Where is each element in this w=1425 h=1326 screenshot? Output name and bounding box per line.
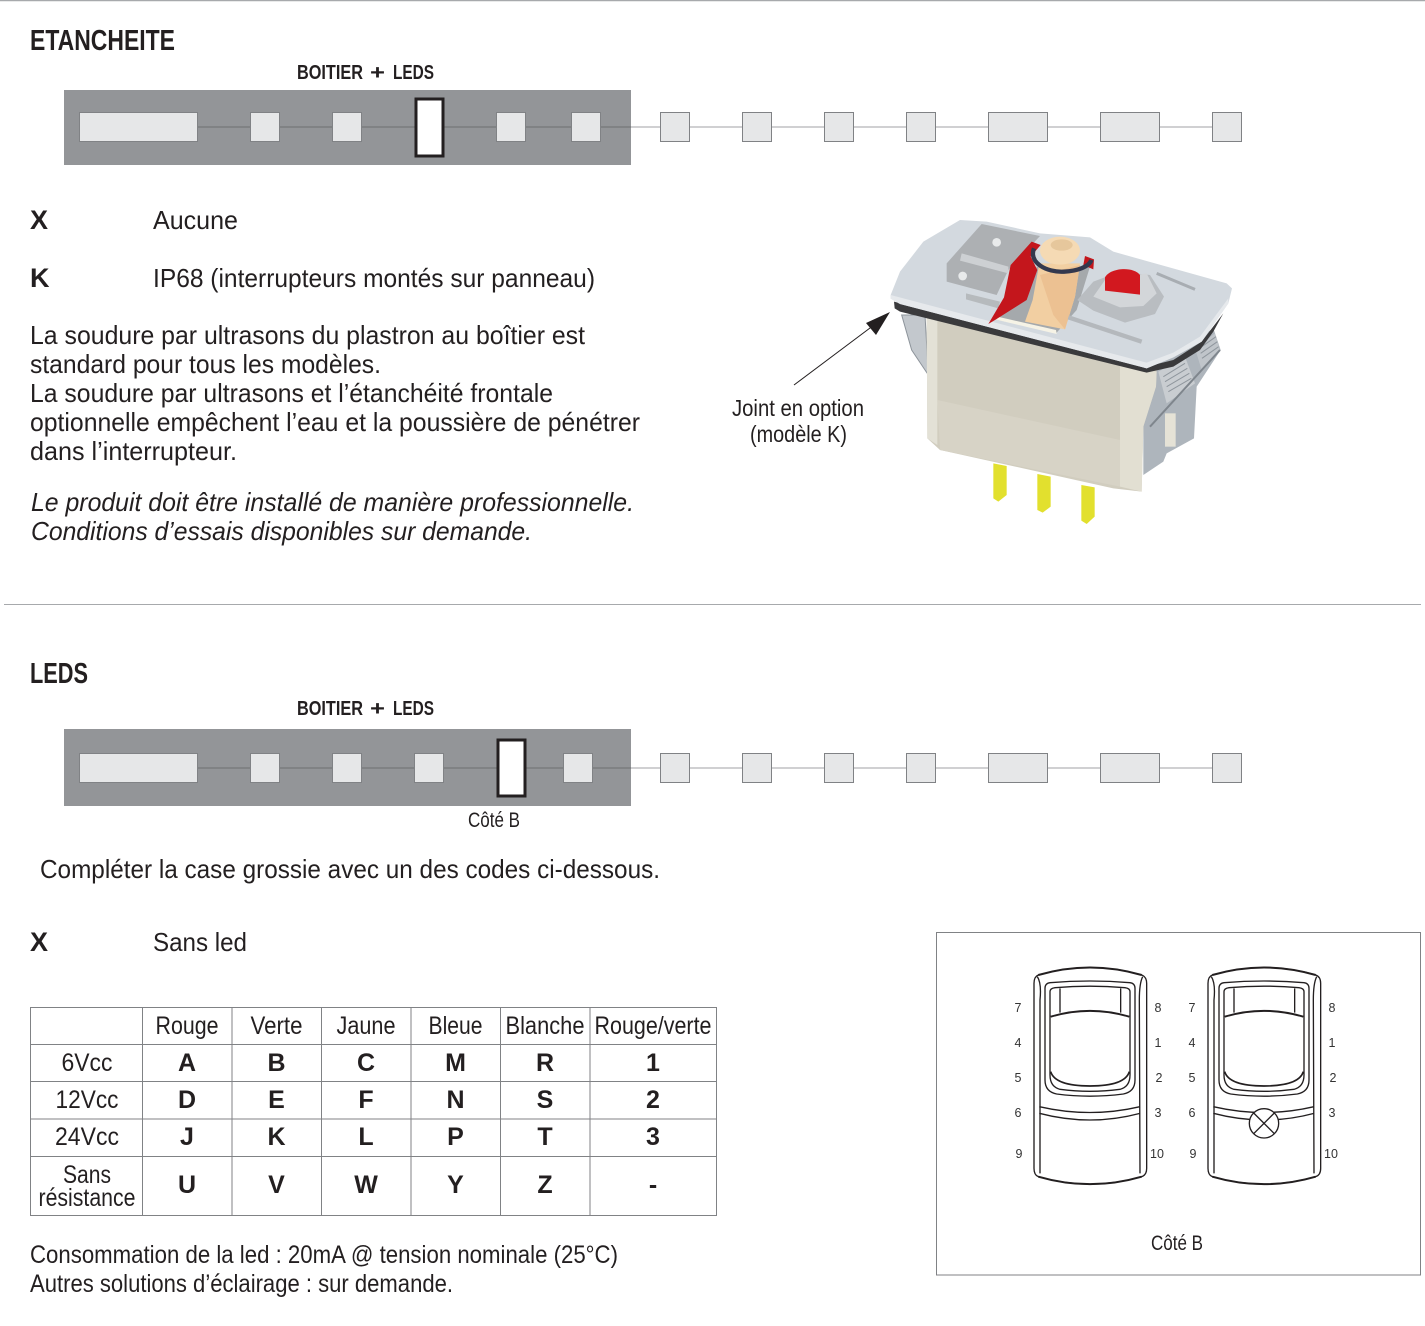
text block: soudure par ultrasons: [30, 320, 640, 466]
pin numbers: 10: [1150, 1147, 1164, 1161]
pin numbers: 3: [1329, 1106, 1336, 1120]
option X: Aucune: Aucune: [153, 205, 238, 235]
table: led codes: C: [357, 1049, 375, 1077]
table: led codes: 6Vcc: [62, 1049, 112, 1077]
heading: ETANCHEITE: ETANCHEITE: [30, 25, 175, 57]
cut opening: [995, 267, 1090, 333]
caption: Cote B: Côté B: [1151, 1232, 1203, 1255]
caption: joint en option: [732, 395, 864, 447]
option X: Sans led: Sans led: [153, 927, 247, 957]
table: led codes: N: [446, 1086, 465, 1114]
red button: [1105, 269, 1140, 295]
label: BOITIER + LEDS: LEDS: [393, 698, 434, 720]
pin numbers: 4: [1015, 1036, 1022, 1050]
table: led codes: [30, 1007, 716, 1216]
table: led codes: V: [268, 1171, 285, 1199]
text block: installation note: Conditions d’essais disponibles sur demande.: [31, 516, 532, 546]
pin numbers: 8: [1329, 1001, 1336, 1015]
text block: installation note: [31, 487, 634, 546]
text block: soudure par ultrasons: optionnelle empêchent l’eau et la poussière de pénétrer: [30, 407, 640, 437]
caption: joint en option: (modèle K): [750, 421, 847, 447]
pin numbers: [1015, 1001, 1338, 1161]
table: led codes: Rouge/verte: [594, 1012, 712, 1040]
option K: IP68: IP68 (interrupteurs montés sur panneau): [153, 263, 595, 293]
pin numbers: 10: [1324, 1147, 1338, 1161]
pins: [993, 463, 1095, 524]
table: led codes: E: [268, 1086, 285, 1114]
label: BOITIER + LEDS: +: [370, 62, 385, 84]
switch outline without lamp: [1034, 967, 1147, 1184]
table: led codes: D: [178, 1086, 196, 1114]
pin numbers: 1: [1155, 1036, 1162, 1050]
pin numbers: 7: [1189, 1001, 1196, 1015]
button housing: [1077, 272, 1164, 323]
footnote: Consommation de la led : 20mA @ tension nominale (25°C): [30, 1241, 618, 1269]
footnote: [30, 1241, 618, 1298]
table: led codes: 3: [646, 1123, 660, 1151]
pin numbers: 9: [1016, 1147, 1023, 1161]
ribs: [1157, 273, 1195, 289]
instruction: Compléter la case grossie avec un des codes ci-dessous.: [40, 854, 660, 884]
table: led codes: P: [447, 1123, 464, 1151]
code diagram: leds: [64, 729, 1242, 806]
text block: soudure par ultrasons: dans l’interrupteur.: [30, 436, 237, 466]
label: BOITIER + LEDS: [297, 62, 434, 84]
label: BOITIER + LEDS: +: [370, 698, 385, 720]
pin numbers: 5: [1189, 1071, 1196, 1085]
right side clips: [1143, 328, 1221, 475]
table: led codes: 12Vcc: [56, 1086, 118, 1114]
code diagram: etancheite: [64, 90, 1242, 165]
option X: Aucune: [30, 205, 238, 235]
label: BOITIER + LEDS: [297, 698, 434, 720]
label: BOITIER + LEDS: LEDS: [393, 62, 434, 84]
table: led codes: Y: [447, 1171, 464, 1199]
footnote: Autres solutions d’éclairage : sur demande.: [30, 1270, 453, 1298]
table: led codes: Rouge: [156, 1012, 218, 1040]
top plate: [891, 220, 1232, 368]
pin numbers: 3: [1155, 1106, 1162, 1120]
panel: Cote B pinout: [936, 932, 1420, 1275]
table: led codes: Bleue: [428, 1012, 482, 1040]
pin numbers: 1: [1329, 1036, 1336, 1050]
table: led codes: T: [537, 1123, 553, 1151]
table: led codes: R: [536, 1049, 554, 1077]
actuator stem: [1025, 263, 1080, 329]
text block: soudure par ultrasons: La soudure par ultrasons et l’étanchéité frontale: [30, 378, 553, 408]
table: led codes: K: [267, 1123, 286, 1151]
table: led codes: résistance: [38, 1184, 136, 1212]
table: led codes: M: [445, 1049, 466, 1077]
pin numbers: 4: [1189, 1036, 1196, 1050]
heading: LEDS: LEDS: [30, 658, 88, 690]
red section: [988, 242, 1041, 324]
caption: joint en option: Joint en option: [732, 395, 864, 421]
text block: installation note: Le produit doit être installé de manière professionnelle.: [31, 487, 634, 517]
option X: Sans led: X: [30, 927, 48, 957]
table: led codes: F: [358, 1086, 374, 1114]
table: led codes: L: [358, 1123, 374, 1151]
table: led codes: Jaune: [336, 1012, 396, 1040]
label: BOITIER + LEDS: BOITIER: [297, 62, 363, 84]
text block: soudure par ultrasons: La soudure par ultrasons du plastron au boîtier est: [30, 320, 586, 350]
gasket: [894, 302, 1223, 373]
pin numbers: 2: [1330, 1071, 1337, 1085]
option K: IP68: K: [30, 263, 50, 293]
rear left clip: [902, 315, 928, 375]
o-ring: [1033, 248, 1091, 272]
option X: Aucune: X: [30, 205, 48, 235]
table: led codes: Sans: [63, 1161, 111, 1189]
pin numbers: 6: [1189, 1106, 1196, 1120]
table: led codes: Z: [537, 1171, 553, 1199]
table: led codes: 24Vcc: [55, 1123, 119, 1151]
table: led codes: 2: [646, 1086, 660, 1114]
pin numbers: 5: [1015, 1071, 1022, 1085]
table: led codes: W: [354, 1171, 378, 1199]
table: led codes: Verte: [250, 1012, 302, 1040]
body: [927, 317, 1157, 492]
recess left: [947, 224, 1040, 295]
arrow to gasket: [794, 312, 890, 385]
table: led codes: S: [537, 1086, 553, 1114]
table: led codes: U: [178, 1171, 196, 1199]
table: led codes: A: [178, 1049, 196, 1077]
pin numbers: 2: [1156, 1071, 1163, 1085]
pin numbers: 6: [1015, 1106, 1022, 1120]
table: led codes: J: [180, 1123, 194, 1151]
table: led codes: -: [649, 1171, 657, 1199]
option X: Sans led: [30, 927, 247, 957]
table: led codes: Blanche: [506, 1012, 584, 1040]
switch outline with lamp: [1208, 967, 1321, 1184]
pin numbers: 9: [1190, 1147, 1197, 1161]
illustration: rocker switch with gasket: [891, 220, 1232, 524]
pin numbers: 7: [1015, 1001, 1022, 1015]
text block: soudure par ultrasons: standard pour tous les modèles.: [30, 349, 381, 379]
table: led codes: 1: [646, 1049, 660, 1077]
table: led codes: B: [267, 1049, 286, 1077]
label: BOITIER + LEDS: BOITIER: [297, 698, 363, 720]
pin numbers: 8: [1155, 1001, 1162, 1015]
label: Cote B: Côté B: [468, 809, 520, 832]
